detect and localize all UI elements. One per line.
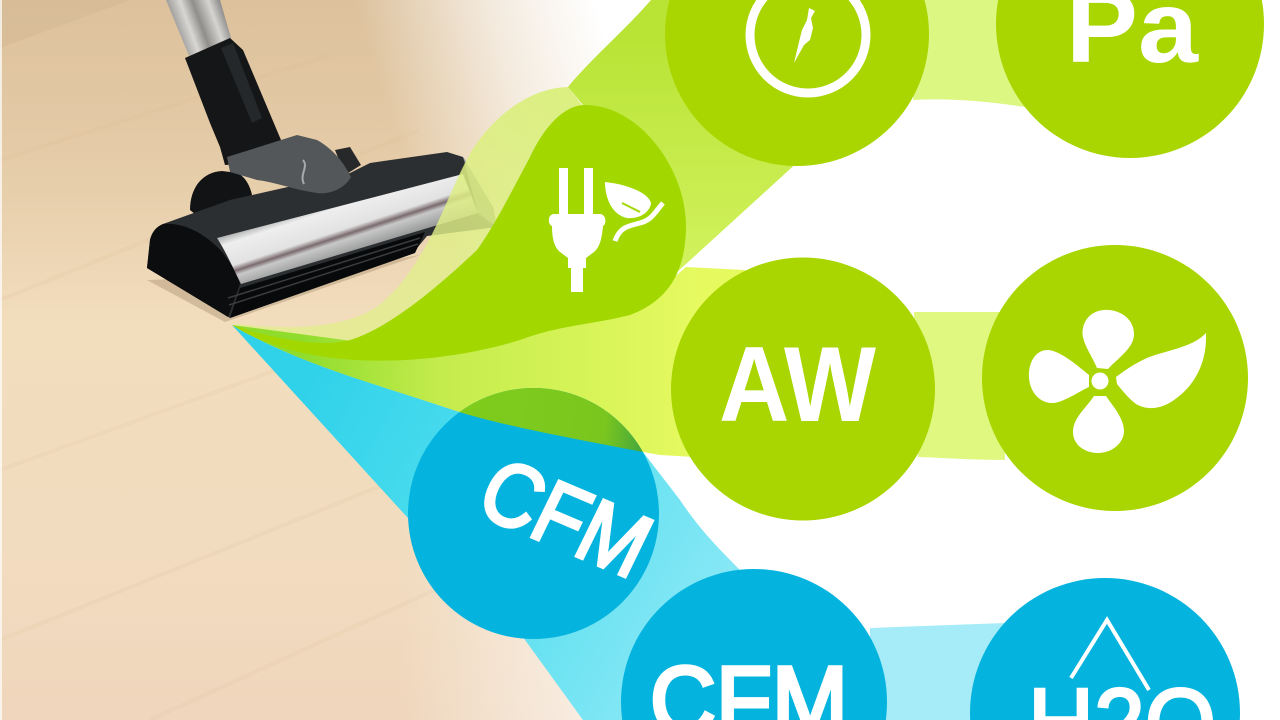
circle: CFM lower — [621, 569, 887, 720]
CFM label: CFM — [464, 439, 667, 597]
icon: leaf — [605, 182, 663, 241]
green overlap cap — [460, 388, 643, 452]
circle: CFM — [408, 388, 659, 639]
circle: AW — [671, 258, 935, 520]
circle: Pa — [996, 0, 1264, 158]
hood — [227, 135, 351, 193]
icon: gauge needle — [794, 8, 815, 63]
icon: fan with leaf blade — [1029, 310, 1206, 453]
vacuum shadow — [147, 255, 420, 322]
icon: gauge ring — [750, 0, 866, 93]
circle: H2O — [970, 578, 1240, 720]
band: blue ribbon — [232, 325, 740, 720]
circle: gauge — [665, 0, 929, 166]
vacuum cleaner — [147, 0, 497, 322]
metal tube — [166, 0, 231, 56]
hood highlight — [303, 160, 305, 184]
band: yellow-green ribbon to AW — [232, 267, 745, 460]
blob: eco plug — [232, 105, 686, 361]
nozzle body — [147, 152, 497, 318]
lower ribs — [228, 232, 425, 318]
band: AW to fan connector — [914, 312, 1005, 460]
neck — [185, 38, 290, 165]
icon: plug — [549, 168, 605, 292]
band: pale ribbon tail — [232, 87, 640, 350]
AW label: AW — [719, 324, 876, 444]
band: top green ribbon — [568, 0, 800, 340]
wheel — [190, 171, 252, 214]
front end cap — [147, 224, 240, 317]
icon: roof peak — [1071, 620, 1149, 690]
band: CFM to H2O connector — [870, 623, 1005, 720]
silver brush window — [217, 174, 478, 284]
circle: fan — [982, 245, 1248, 511]
clear end cap — [463, 157, 497, 227]
rear connector — [335, 147, 361, 175]
band: gauge to Pa connector — [913, 0, 1025, 107]
